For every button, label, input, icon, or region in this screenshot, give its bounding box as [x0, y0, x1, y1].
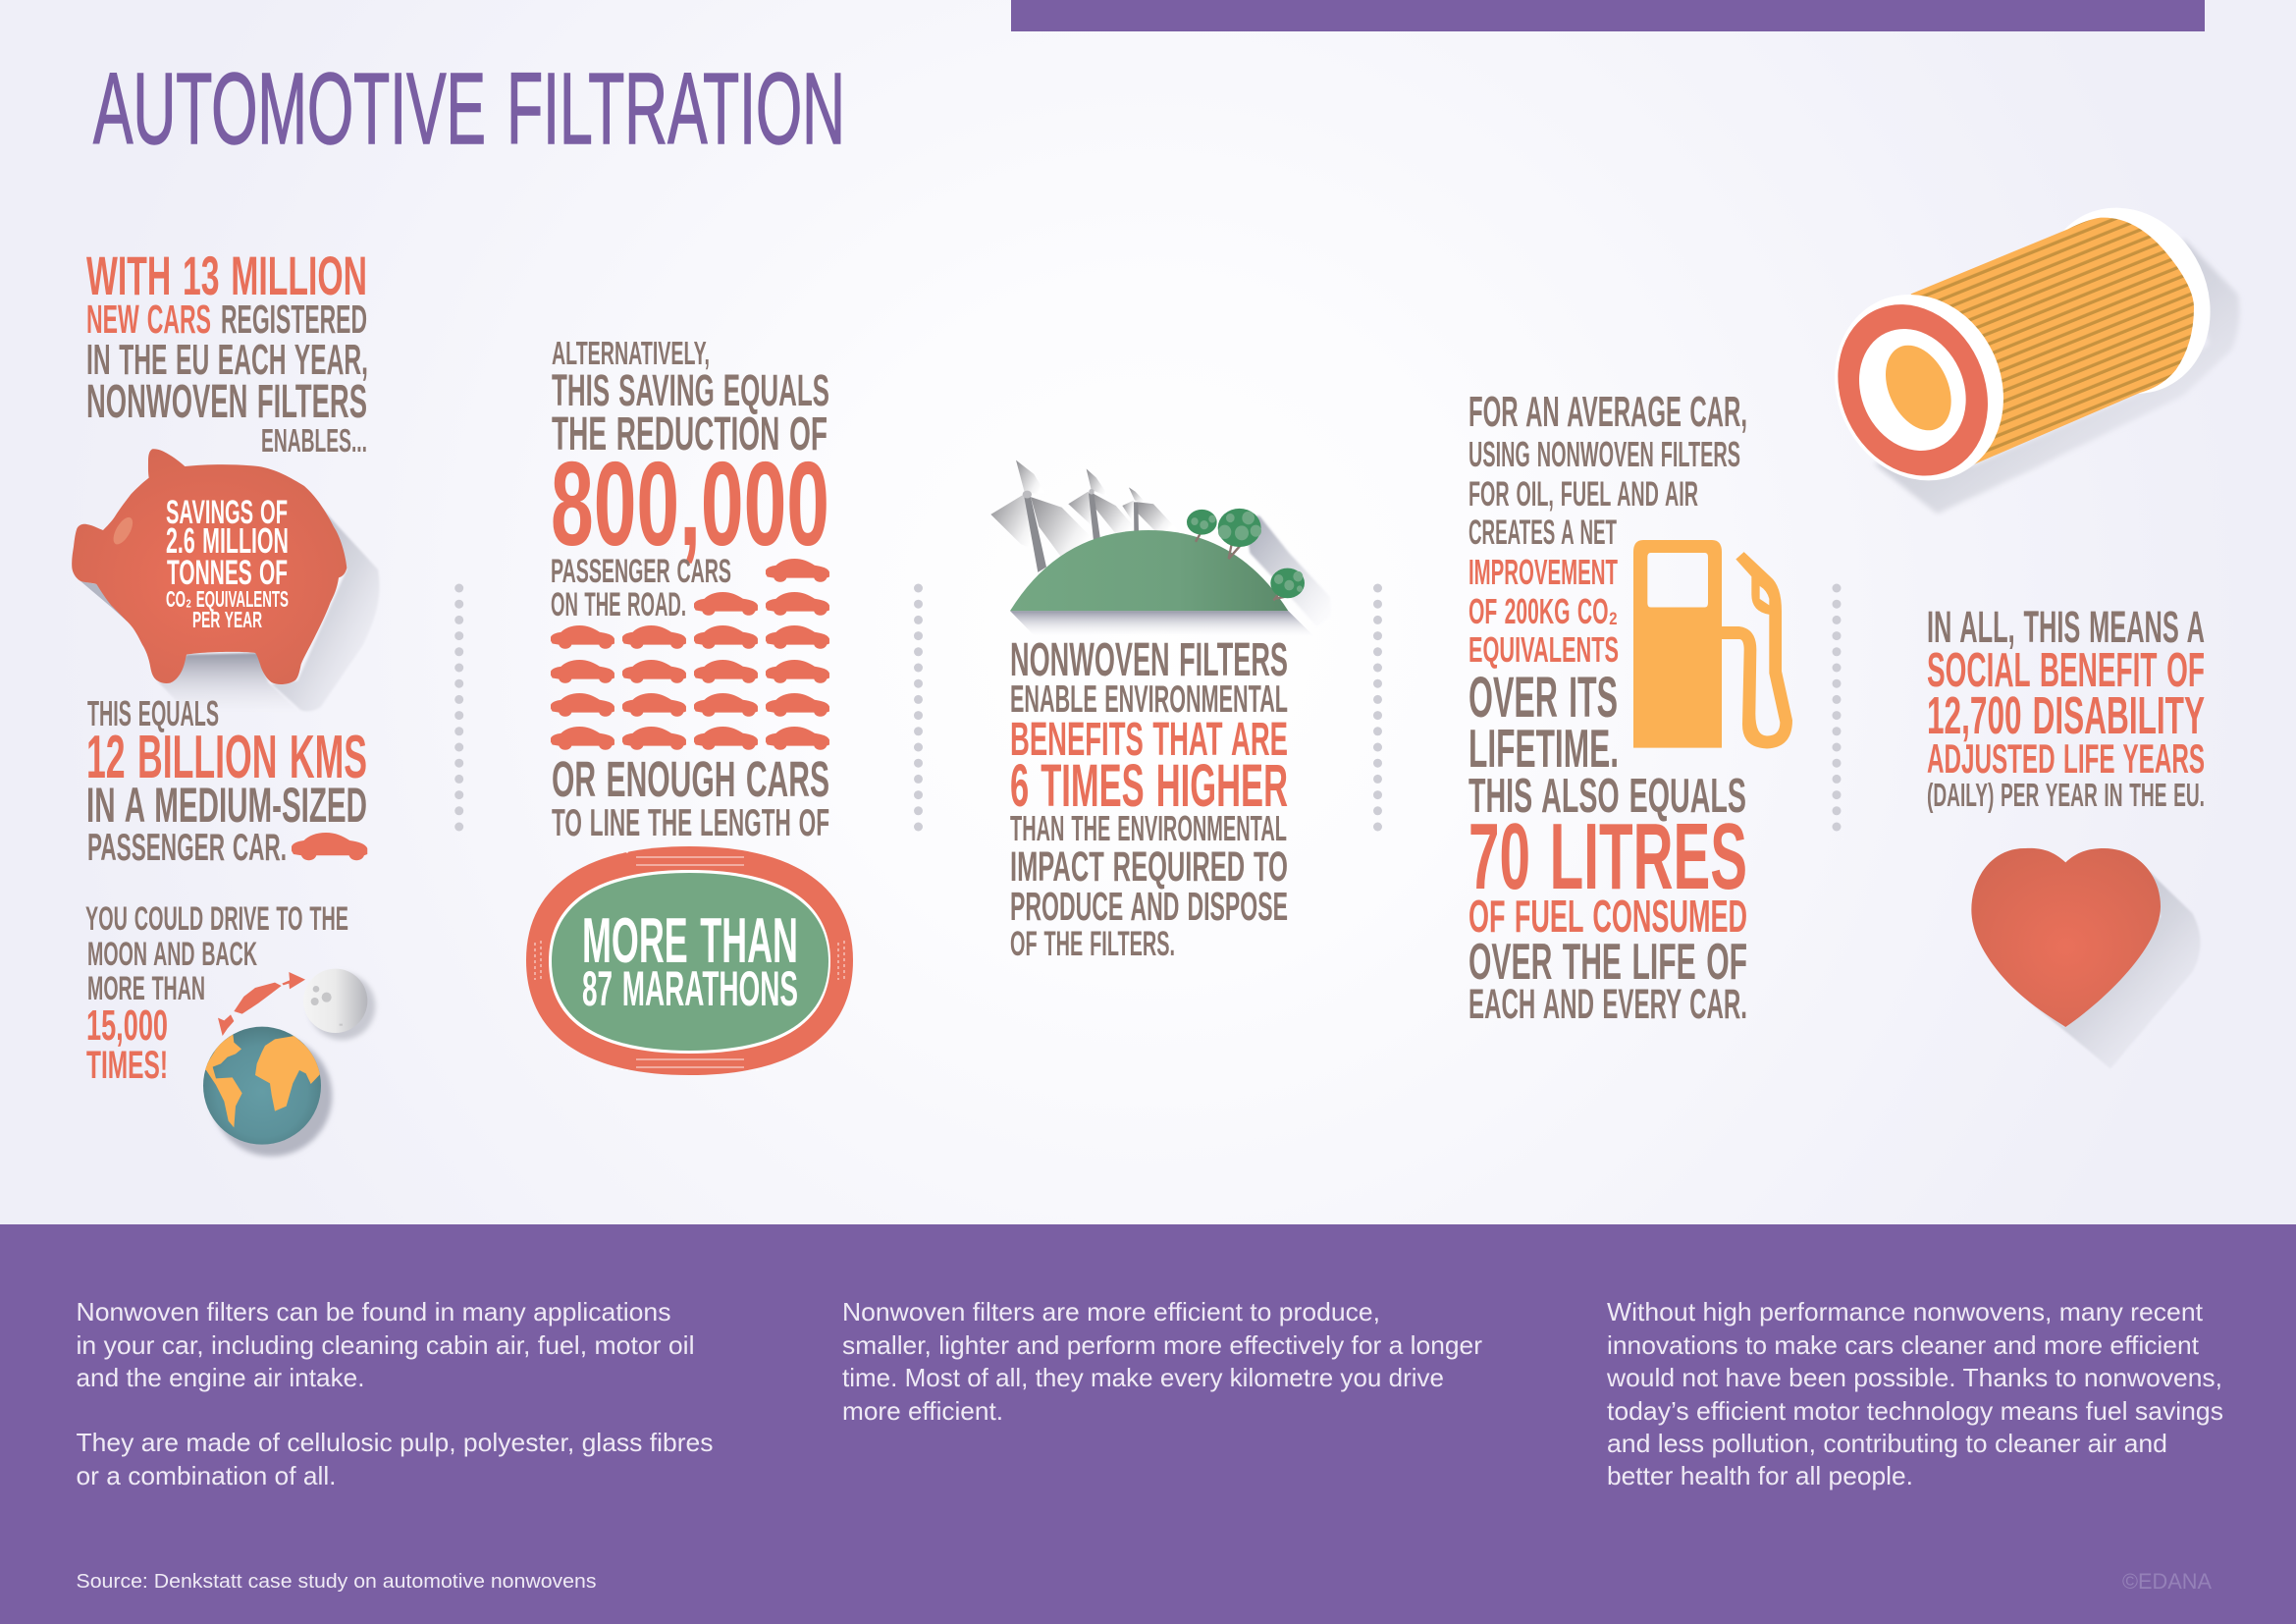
- divider dots 2: [914, 583, 923, 831]
- text block: disability adjusted life years: [1927, 602, 2205, 813]
- text block: where filters are found: Nonwoven filters can be found in many applications: [77, 1297, 671, 1326]
- panel: column 3 environment: [990, 460, 1332, 963]
- panel: bottom information band: [0, 1224, 2296, 1624]
- text block: moon and back: TIMES!: [86, 1044, 168, 1087]
- text block: 800,000 cars: ON THE ROAD.: [551, 586, 686, 623]
- text block: more efficient: smaller, lighter and perform more effectively for a longer: [842, 1330, 1482, 1360]
- text block: enough cars: OR ENOUGH CARS: [552, 751, 829, 807]
- text block: 13 million new cars: ENABLES...: [261, 422, 367, 459]
- text block: 800,000 cars: [551, 335, 829, 623]
- icon: car: [292, 833, 367, 860]
- text block: average car: OVER ITS: [1468, 666, 1618, 730]
- text block: 13 million new cars: [86, 244, 368, 459]
- text block: enough cars: TO LINE THE LENGTH OF: [552, 802, 829, 844]
- text block: average car: EQUIVALENTS: [1468, 629, 1619, 670]
- icon: running track: 87 MARATHONS: [582, 961, 798, 1016]
- text block: where filters are found: and the engine air intake.: [77, 1363, 365, 1392]
- text block: average car: EACH AND EVERY CAR.: [1468, 981, 1747, 1028]
- panel: column 5 social benefit: [1927, 602, 2205, 1068]
- icon: piggy bank with savings: PER YEAR: [192, 607, 262, 632]
- text block: where filters are found: or a combination of all.: [77, 1461, 336, 1490]
- text block: 12 billion kms: THIS EQUALS: [87, 693, 219, 733]
- icon: earth, moon and car: [203, 969, 375, 1157]
- text block: average car: OVER THE LIFE OF: [1468, 934, 1747, 991]
- text block: moon and back: MOON AND BACK: [87, 936, 257, 973]
- panel: column 1 savings: [72, 244, 380, 1157]
- text block: average car: THIS ALSO EQUALS: [1468, 770, 1746, 823]
- text block: average car: IMPROVEMENT: [1468, 552, 1618, 592]
- text block: 800,000 cars: THE REDUCTION OF: [552, 408, 828, 460]
- text block: without nonwovens: Without high performance nonwovens, many recent: [1607, 1297, 2204, 1326]
- icon: heart: [1971, 848, 2201, 1068]
- title: AUTOMOTIVE FILTRATION: [93, 52, 845, 165]
- text block: 12 billion kms: PASSENGER CAR.: [87, 827, 287, 869]
- text block: where filters are found: [77, 1297, 713, 1490]
- text block: average car: LIFETIME.: [1468, 718, 1619, 779]
- divider dots 1: [454, 583, 463, 831]
- icon: piggy bank with savings: SAVINGS OF: [166, 494, 288, 531]
- text block: more efficient: more efficient.: [842, 1396, 1003, 1426]
- text block: average car: 70 LITRES: [1468, 804, 1747, 909]
- divider dots 3: [1373, 583, 1382, 831]
- text block: moon and back: [85, 900, 348, 1087]
- text block: 800,000 cars: THIS SAVING EQUALS: [552, 365, 829, 415]
- text block: without nonwovens: [1606, 1297, 2223, 1490]
- text block: without nonwovens: innovations to make cars cleaner and more efficient: [1607, 1330, 2200, 1360]
- icon: piggy bank with savings: 2.6 MILLION: [166, 520, 289, 561]
- icon: hill with wind turbines and trees: [990, 460, 1332, 636]
- text block: more efficient: time. Most of all, they make every kilometre you drive: [842, 1363, 1444, 1392]
- text block: moon and back: 15,000: [86, 1001, 168, 1050]
- text block: 800,000 cars: PASSENGER CARS: [551, 553, 731, 590]
- text block: without nonwovens: and less pollution, contributing to cleaner air and: [1607, 1429, 2167, 1458]
- text block: six times higher: NONWOVEN FILTERS: [1010, 634, 1288, 686]
- text block: average car: OF 200KG CO₂: [1468, 591, 1618, 631]
- text block: average car: OF FUEL CONSUMED: [1468, 891, 1747, 942]
- panel: column 2 cars and marathons: [526, 335, 853, 1075]
- text block: six times higher: ENABLE ENVIRONMENTAL: [1010, 678, 1288, 721]
- text block: six times higher: PRODUCE AND DISPOSE: [1010, 884, 1288, 929]
- copyright: ©EDANA: [2122, 1569, 2212, 1594]
- source line: Source: Denkstatt case study on automotive nonwovens: [77, 1571, 597, 1593]
- text block: six times higher: OF THE FILTERS.: [1010, 925, 1175, 963]
- icon: piggy bank with savings: [72, 449, 380, 715]
- text block: 12 billion kms: [86, 693, 367, 869]
- panel: column 4 fuel: [1468, 388, 1792, 1028]
- text block: where filters are found: in your car, including cleaning cabin air, fuel, motor oil: [77, 1330, 695, 1360]
- text block: more efficient: [842, 1297, 1482, 1426]
- icon: running track: MORE THAN: [582, 904, 798, 976]
- text block: without nonwovens: would not have been possible. Thanks to nonwovens,: [1606, 1363, 2222, 1392]
- divider dots 4: [1832, 583, 1842, 831]
- text block: more efficient: Nonwoven filters are more efficient to produce,: [842, 1297, 1380, 1326]
- text block: six times higher: BENEFITS THAT ARE: [1010, 714, 1288, 766]
- text block: 12 billion kms: IN A MEDIUM-SIZED: [86, 778, 367, 833]
- text block: average car: USING NONWOVEN FILTERS: [1468, 434, 1740, 474]
- text block: 13 million new cars: IN THE EU EACH YEAR,: [86, 336, 368, 384]
- text block: average car: CREATES A NET: [1468, 514, 1617, 552]
- text block: 13 million new cars: NONWOVEN FILTERS: [86, 376, 367, 428]
- icon: piggy bank with savings: CO₂ EQUIVALENTS: [166, 586, 289, 612]
- text block: 12 billion kms: 12 BILLION KMS: [86, 724, 367, 791]
- text block: six times higher: IMPACT REQUIRED TO: [1010, 843, 1288, 891]
- text block: moon and back: MORE THAN: [87, 970, 205, 1007]
- text block: 13 million new cars: REGISTERED: [221, 297, 367, 342]
- icon: piggy bank with savings: TONNES OF: [167, 554, 288, 592]
- text block: average car: FOR AN AVERAGE CAR,: [1468, 388, 1747, 436]
- text block: 13 million new cars: WITH 13 MILLION: [86, 244, 367, 306]
- text block: six times higher: THAN THE ENVIRONMENTAL: [1010, 808, 1287, 848]
- text block: without nonwovens: better health for all people.: [1607, 1461, 1913, 1490]
- text block: average car: FOR OIL, FUEL AND AIR: [1468, 475, 1698, 514]
- top purple bar: [1011, 0, 2205, 31]
- icon: oil filter cartridge: [1804, 180, 2240, 514]
- text block: average car: [1468, 388, 1747, 1028]
- text block: enough cars: [552, 751, 829, 844]
- text block: 800,000 cars: ALTERNATIVELY,: [552, 335, 710, 371]
- icon grid: cars: [551, 559, 829, 750]
- text block: 800,000 cars: 800,000: [551, 437, 829, 570]
- text block: 13 million new cars: NEW CARS: [86, 297, 211, 342]
- text block: without nonwovens: today’s efficient motor technology means fuel savings: [1607, 1396, 2223, 1426]
- text block: six times higher: [1010, 634, 1288, 963]
- icon: fuel pump: [1633, 540, 1792, 748]
- text block: moon and back: YOU COULD DRIVE TO THE: [85, 900, 348, 938]
- text block: where filters are found: They are made of cellulosic pulp, polyester, glass fibres: [77, 1428, 713, 1457]
- icon: running track: [526, 846, 853, 1075]
- text block: six times higher: 6 TIMES HIGHER: [1010, 752, 1288, 819]
